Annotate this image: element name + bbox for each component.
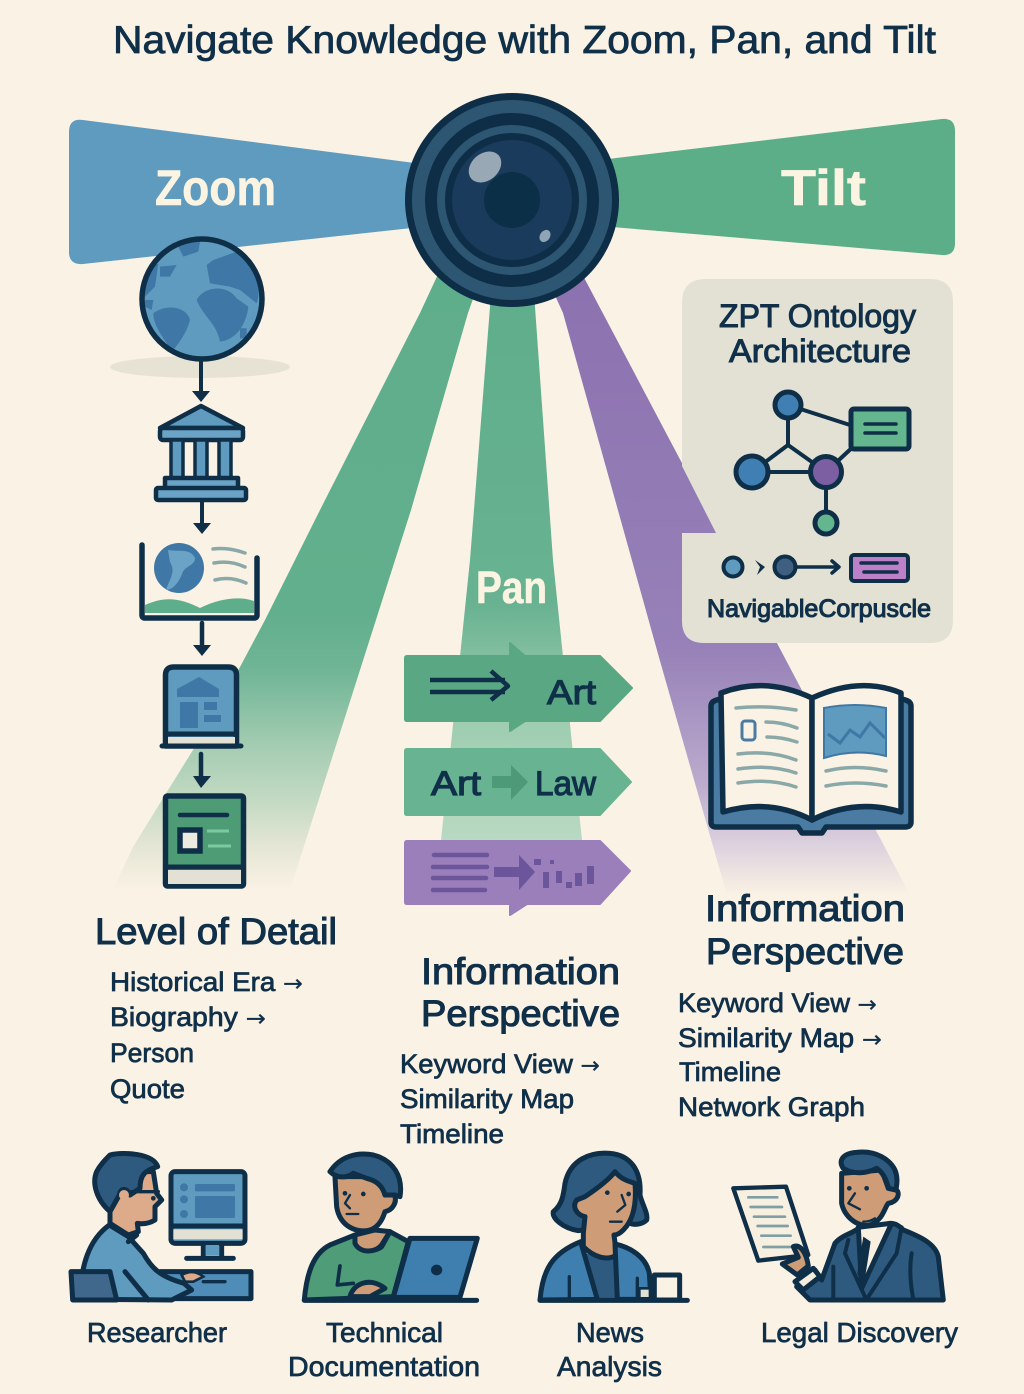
icon: temple (156, 406, 246, 500)
hair (95, 1154, 158, 1212)
list: perspective right: Network Graph (678, 1092, 865, 1122)
label: Pan: Pan (476, 562, 547, 613)
base (304, 1293, 477, 1308)
icon: news analyst (540, 1153, 687, 1300)
network diagram (736, 392, 909, 534)
icon: researcher (71, 1154, 251, 1300)
facial features (605, 1190, 631, 1196)
desk (160, 1272, 251, 1299)
panel: ZPT ontology architecture (682, 279, 953, 643)
shirt (585, 1253, 617, 1300)
hand (782, 1246, 808, 1275)
list: perspective center (400, 1049, 600, 1149)
shirt and tie (858, 1223, 892, 1288)
label: news analysis (557, 1317, 662, 1382)
heading: ZPT ontology architecture: Architecture (729, 333, 911, 369)
jacket (540, 1242, 597, 1300)
suit (797, 1223, 943, 1300)
corpuscle flow icons (724, 555, 908, 581)
facial features (343, 1191, 366, 1196)
beam: pan left green (113, 270, 478, 890)
icon: legal discovery person (733, 1152, 943, 1300)
beam: pan center green (440, 290, 583, 850)
list: perspective center: Keyword View → (400, 1049, 600, 1079)
list: perspective center: Timeline (400, 1119, 504, 1149)
label: technical documentation (288, 1317, 480, 1382)
double arrow (430, 671, 508, 700)
label: news analysis: News (576, 1317, 644, 1348)
hair (553, 1153, 647, 1231)
label: technical documentation: Technical (326, 1317, 443, 1348)
list: perspective right (678, 988, 882, 1122)
face (110, 1172, 162, 1235)
icon: technical documentation person (304, 1154, 477, 1300)
heading: information perspective right: Information (705, 888, 905, 929)
neck and face (575, 1172, 635, 1258)
beam: purple (548, 270, 910, 895)
title: Navigate Knowledge with Zoom, Pan, and Tilt (113, 19, 936, 62)
arrow: globe to era (192, 360, 210, 402)
label: NavigableCorpuscle: NavigableCorpuscle (707, 595, 931, 623)
beam: zoom (69, 120, 430, 264)
list: perspective right: Similarity Map → (678, 1023, 882, 1053)
label: technical documentation: Documentation (288, 1351, 480, 1382)
heading: information perspective center (421, 951, 620, 1034)
chevron: art to law (405, 749, 631, 815)
document (733, 1187, 808, 1261)
body (80, 1225, 192, 1300)
heading: ZPT ontology architecture: ZPT Ontology (719, 298, 916, 334)
label: news analysis: Analysis (557, 1351, 662, 1382)
cuff (795, 1268, 820, 1290)
icon: tablet device (162, 667, 241, 746)
body (304, 1232, 408, 1300)
list: perspective right: Timeline (679, 1057, 781, 1087)
heading: information perspective center: Perspective (421, 993, 620, 1034)
facial features (847, 1186, 869, 1191)
icon: globe (110, 239, 290, 378)
list: level of detail: Biography → (110, 1002, 266, 1032)
heading: ZPT ontology architecture (719, 298, 916, 369)
label: Art: Art (547, 674, 597, 712)
icon: green book (166, 796, 244, 886)
arrow between topics (492, 765, 528, 800)
heading: information perspective right: Perspective (706, 931, 904, 972)
desk items (654, 1275, 680, 1300)
arrow (494, 855, 535, 890)
hand (182, 1272, 203, 1282)
beam: tilt (600, 119, 955, 255)
mini chart (534, 859, 594, 888)
heading: information perspective right (705, 888, 905, 972)
heading: level of detail: Level of Detail (95, 911, 337, 952)
icon: book with globe (142, 543, 257, 618)
hair (841, 1152, 897, 1190)
arrow: biography to person (193, 623, 211, 656)
list: level of detail: Historical Era → (110, 967, 303, 997)
chevron: keywords to charts (405, 841, 630, 915)
label: legal discovery: Legal Discovery (761, 1317, 958, 1348)
chair (71, 1272, 117, 1300)
list: perspective right: Keyword View → (678, 988, 877, 1018)
arrow: person to quote (193, 754, 211, 788)
list: level of detail (110, 967, 303, 1104)
arrow: era to biography (193, 502, 211, 534)
glasses (132, 1187, 158, 1197)
laptop (393, 1238, 477, 1297)
heading: information perspective center: Information (421, 951, 620, 992)
hand (350, 1282, 385, 1297)
label: Law: Law (535, 765, 596, 803)
list: level of detail: Person (110, 1038, 194, 1068)
camera lens (405, 93, 619, 307)
ear (119, 1190, 129, 1200)
head (842, 1170, 898, 1225)
label: researcher: Researcher (87, 1317, 227, 1348)
chevron: pan to art (405, 643, 632, 731)
text lines (433, 855, 487, 890)
list: perspective center: Similarity Map (400, 1084, 574, 1114)
icon: open book (711, 686, 911, 833)
label: Art: Art (431, 765, 482, 803)
hair (330, 1154, 401, 1197)
list: level of detail: Quote (110, 1074, 185, 1104)
label: Tilt: Tilt (781, 160, 866, 216)
head (335, 1177, 395, 1231)
label: Zoom: Zoom (155, 160, 276, 216)
monitor (171, 1172, 245, 1258)
